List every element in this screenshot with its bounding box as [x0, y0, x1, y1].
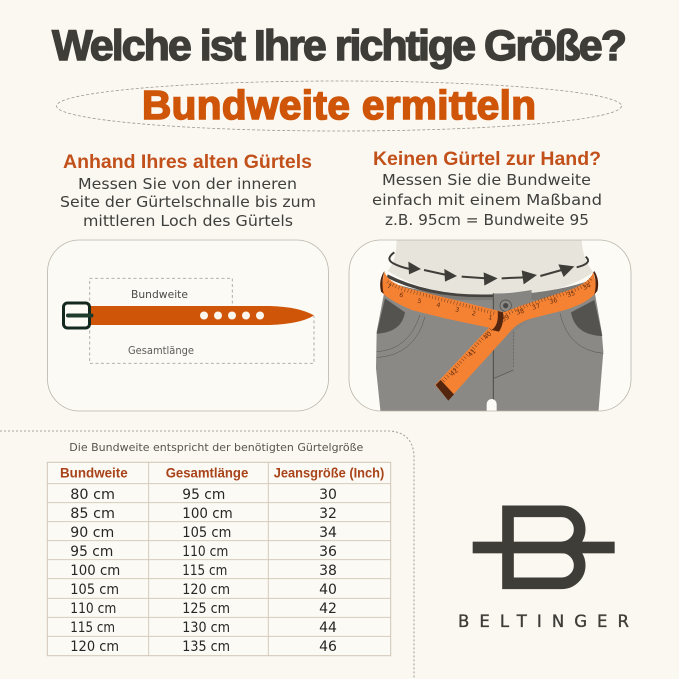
column: Jeansgröße: 44 [319, 620, 337, 636]
column: Bundweite: 115 cm [70, 620, 115, 636]
tape measure: front end [380, 271, 503, 332]
right heading: Keinen Gürtel zur Hand? [373, 148, 601, 170]
column: Bundweite: 120 cm [70, 639, 119, 655]
column: Gesamtlänge: 105 cm [182, 525, 231, 541]
right instructions [372, 148, 602, 229]
left instructions [60, 151, 316, 230]
column: Jeansgröße: 36 [319, 544, 337, 560]
tape measure: long strip: 40 [483, 331, 493, 341]
right body text: z.B. 95cm = Bundweite 95 [385, 211, 589, 229]
tape measure: long strip: 42 [449, 367, 460, 378]
left body text [60, 175, 316, 230]
tape measure: front end: 4 [436, 302, 441, 309]
table header [60, 466, 384, 480]
column: Gesamtlänge [182, 487, 233, 655]
column: Bundweite: 110 cm [70, 601, 116, 617]
column: Bundweite: 100 cm [70, 563, 120, 579]
panel: size table [0, 431, 414, 679]
tape measure: long strip [435, 271, 598, 401]
tape measure: long strip: 39 [500, 314, 511, 324]
column: Bundweite: 85 cm [70, 506, 115, 522]
icon: B monogram [473, 511, 615, 583]
tape measure: long strip: 34 [582, 282, 592, 292]
tape measure: front end: 5 [417, 298, 422, 305]
tape measure: front end: 1 [488, 314, 493, 322]
logo [458, 511, 629, 631]
column: Gesamtlänge: 130 cm [182, 620, 230, 636]
column: Gesamtlänge: 100 cm [182, 506, 233, 522]
icon: belt [64, 303, 314, 328]
column: Jeansgröße [319, 487, 337, 655]
brand name: BELTINGER [458, 612, 629, 631]
tape measure: front end: 7 [386, 283, 392, 291]
column: Gesamtlänge: 135 cm [182, 639, 230, 655]
label: Bundweite: Bundweite [131, 288, 188, 301]
column: Gesamtlänge: 120 cm [182, 582, 230, 598]
column: Jeansgröße: 30 [319, 487, 337, 503]
size table [47, 462, 391, 656]
left body text: mittleren Loch des Gürtels [83, 212, 293, 230]
column: Bundweite: 105 cm [70, 582, 119, 598]
column: Gesamtlänge: 125 cm [182, 601, 230, 617]
subtitle: Bundweite ermitteln [142, 82, 536, 128]
tape measure: long strip: 41 [467, 348, 478, 359]
tape measure: long strip: 38 [515, 308, 525, 317]
left body text: Messen Sie von der inneren [78, 175, 297, 193]
table header: Jeansgröße (Inch) [274, 466, 384, 480]
tape measure: long strip: 37 [531, 303, 541, 312]
column: Jeansgröße: 40 [319, 582, 337, 598]
panel: waist measuring illustration [349, 238, 631, 419]
left body text: Seite der Gürtelschnalle bis zum [60, 193, 316, 211]
right body text: Messen Sie die Bundweite [382, 171, 591, 189]
torso [388, 238, 593, 297]
column: Gesamtlänge: 115 cm [182, 563, 227, 579]
column: Jeansgröße: 46 [319, 639, 337, 655]
label: Gesamtlänge: Gesamtlänge [128, 344, 194, 357]
subtitle badge [56, 81, 622, 131]
column: Gesamtlänge: 95 cm [182, 487, 225, 503]
table header: Bundweite [60, 466, 128, 480]
panel: belt diagram [48, 240, 328, 411]
tape measure: long strip: 35 [566, 290, 576, 299]
table caption: Die Bundweite entspricht der benötigten Gürtelgröße [69, 441, 364, 454]
column: Jeansgröße: 34 [319, 525, 337, 541]
left heading: Anhand Ihres alten Gürtels [63, 151, 312, 173]
jeans [376, 274, 603, 419]
table header: Gesamtlänge [166, 466, 249, 480]
right body text [372, 171, 602, 229]
tape measure: long strip: 36 [549, 297, 558, 306]
title: Welche ist Ihre richtige Größe? [52, 22, 627, 70]
column: Bundweite: 80 cm [70, 487, 115, 503]
column: Jeansgröße: 32 [319, 506, 337, 522]
tape measure: front end: 3 [454, 306, 460, 314]
column: Bundweite [70, 487, 120, 655]
column: Jeansgröße: 42 [319, 601, 337, 617]
column: Bundweite: 90 cm [70, 525, 114, 541]
right body text: einfach mit einem Maßband [372, 191, 602, 209]
tape measure: front end: 6 [398, 292, 404, 300]
tape measure: front end: 2 [471, 310, 476, 318]
column: Gesamtlänge: 110 cm [182, 544, 228, 560]
arrows around the waist [389, 252, 588, 286]
column: Jeansgröße: 38 [319, 563, 337, 579]
column: Bundweite: 95 cm [70, 544, 113, 560]
